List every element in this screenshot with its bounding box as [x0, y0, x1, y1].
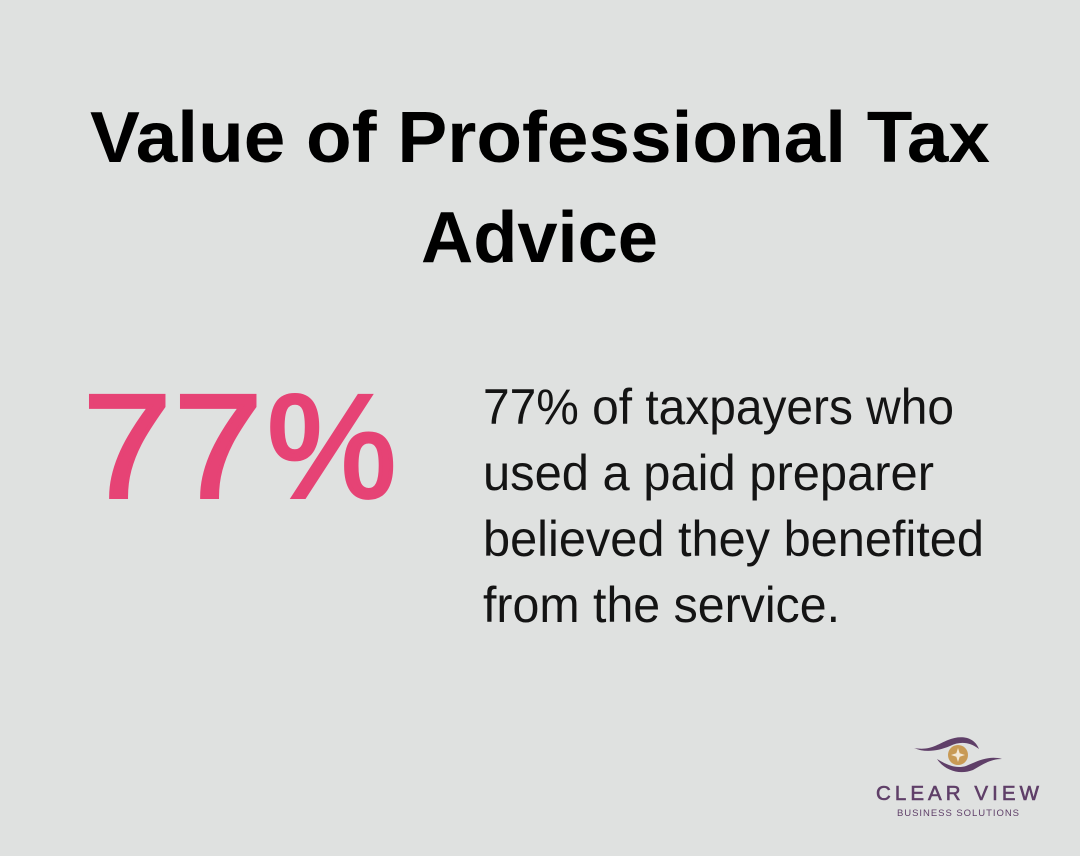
logo: Clear View Business Solutions [876, 737, 1040, 819]
description text: believed they benefited [483, 511, 984, 567]
description text [483, 379, 984, 633]
title [90, 98, 990, 278]
big statistic: 7 [83, 365, 171, 529]
description text: from the service. [483, 577, 840, 633]
big statistic: 7 [174, 365, 262, 529]
description text: 77% of taxpayers who [483, 379, 954, 435]
logo wordmark: CLEAR VIEW [876, 782, 1040, 805]
big statistic: % [267, 364, 396, 528]
description text: used a paid preparer [483, 445, 934, 501]
title: Value of Professional Tax [90, 98, 990, 178]
icon: eye [914, 737, 1002, 772]
big statistic [83, 364, 396, 529]
logo tagline: BUSINESS SOLUTIONS [897, 808, 1019, 819]
title: Advice [421, 198, 658, 278]
